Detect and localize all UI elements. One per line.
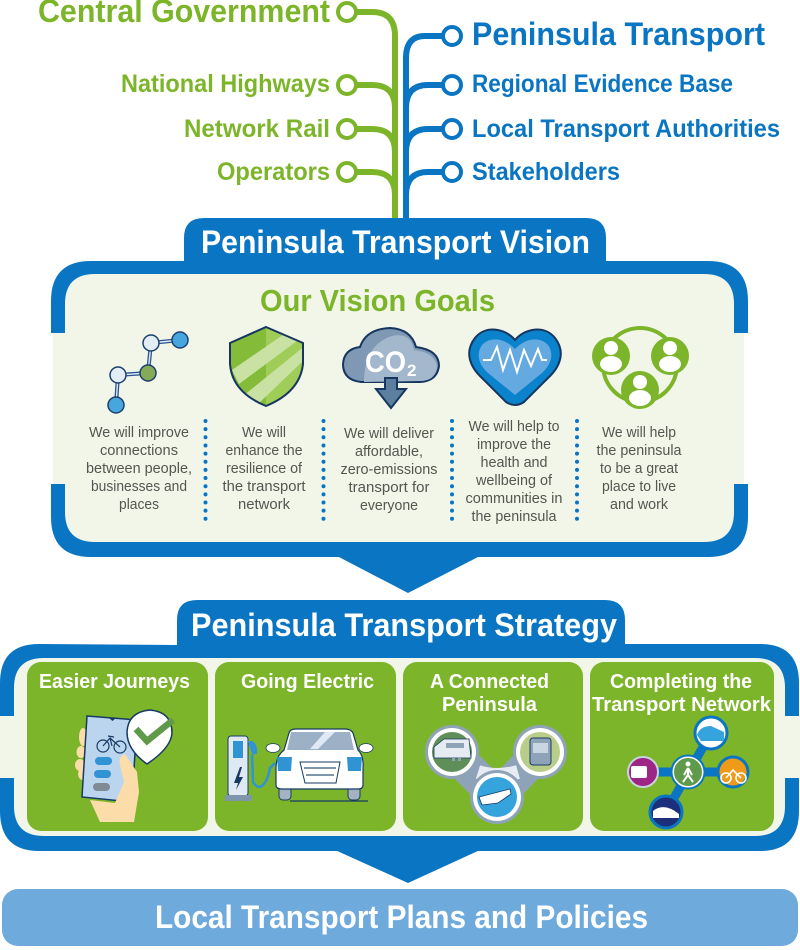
icon: community [592,328,689,409]
goal text: place: place to live [602,479,676,495]
right labels: Local Transport Authorities [472,115,780,143]
right labels [472,16,780,186]
card: a connected peninsula: A Connected [430,671,549,693]
goal text: resilience: resilience of [226,461,303,477]
icon: CO2 cloud [343,328,439,408]
goal text: health [466,419,562,525]
left labels: National Highways [121,70,330,98]
icon: car [266,729,373,801]
left labels: Operators [217,158,330,186]
icon: check badge [127,710,173,764]
goal text: zero emissions: affordable, [355,444,423,460]
strategy frame upper [0,600,799,716]
card: completing the transport network [590,662,774,831]
card: completing the transport network: Transport Network [592,694,772,716]
green nodes [338,3,356,181]
goal text: resilience: enhance the [226,443,302,459]
goal text: resilience: We will [242,425,286,441]
card: going electric [215,662,396,831]
goal text: resilience: network [238,497,291,513]
right labels: Peninsula Transport [472,16,765,52]
strategy inner background [0,658,800,836]
icon: phone in hand [75,716,139,822]
icon: CO2 cloud: CO [365,346,406,379]
vision frame [51,218,748,333]
banner: local transport plans and policies [2,889,798,946]
goal text: place: We will help [602,425,676,441]
vision inner background [53,274,744,542]
panel: vision [51,218,748,557]
strategy frame lower [0,778,799,851]
goal text: health: communities in [466,491,562,507]
card: going electric: Going Electric [241,671,374,693]
icon: heart [469,330,561,405]
blue branch lines [406,36,443,220]
goal text: health: improve the [477,437,551,453]
icon: network of modes [628,717,748,828]
card: a connected peninsula: Peninsula [442,694,538,716]
arrow: strategy to local plans [335,850,480,883]
goal text: zero emissions: We will deliver [344,426,434,442]
goal text: connections: between people, [86,461,192,477]
goal text: health: health and [480,455,548,471]
card: a connected peninsula [403,662,583,831]
card: completing the transport network: Completing the [610,671,752,693]
right labels: Regional Evidence Base [472,70,733,98]
goal text: health: wellbeing of [475,473,553,489]
goal text: zero emissions: transport for [348,480,430,496]
blue nodes [443,27,461,181]
goal text: health: the peninsula [472,509,557,525]
strategy title: Peninsula Transport Strategy [191,607,617,643]
goal text: resilience [222,425,306,513]
left labels: Network Rail [184,115,330,143]
goal text: connections [86,425,192,513]
goal text: zero emissions: zero-emissions [340,462,438,478]
card: easier journeys [27,662,208,831]
goal text: zero emissions: everyone [360,498,418,514]
goal text: connections: businesses and [91,479,187,495]
icon: connected loop [425,725,567,824]
goal text: connections: connections [100,443,178,459]
goal text: place: to be a great [600,461,678,477]
goal text: place: and work [610,497,669,513]
tree diagram: stakeholders feeding the vision [38,0,780,220]
arrow: vision to strategy [337,556,480,593]
right labels: Stakeholders [472,158,620,186]
left labels [38,0,330,186]
vision title: Peninsula Transport Vision [201,224,590,260]
icon: charger [225,736,275,801]
goal text: connections: We will improve [89,425,189,441]
goal text: health: We will help to [468,419,560,435]
goal text: place [596,425,682,513]
banner: local transport plans and policies: Local Transport Plans and Policies [155,899,648,935]
vision frame lower [51,484,748,557]
icon: connections [108,332,188,413]
card: easier journeys: Easier Journeys [39,671,190,693]
green branch lines [356,12,395,220]
goal text: place: the peninsula [596,443,682,459]
goal text: zero emissions [340,426,438,514]
panel: strategy [0,600,800,851]
goal text: connections: places [119,497,159,513]
icon: CO2 cloud: 2 [407,361,416,380]
heading: our vision goals: Our Vision Goals [260,283,495,318]
icon: shield [229,326,304,408]
goal text: resilience: the transport [222,479,306,495]
